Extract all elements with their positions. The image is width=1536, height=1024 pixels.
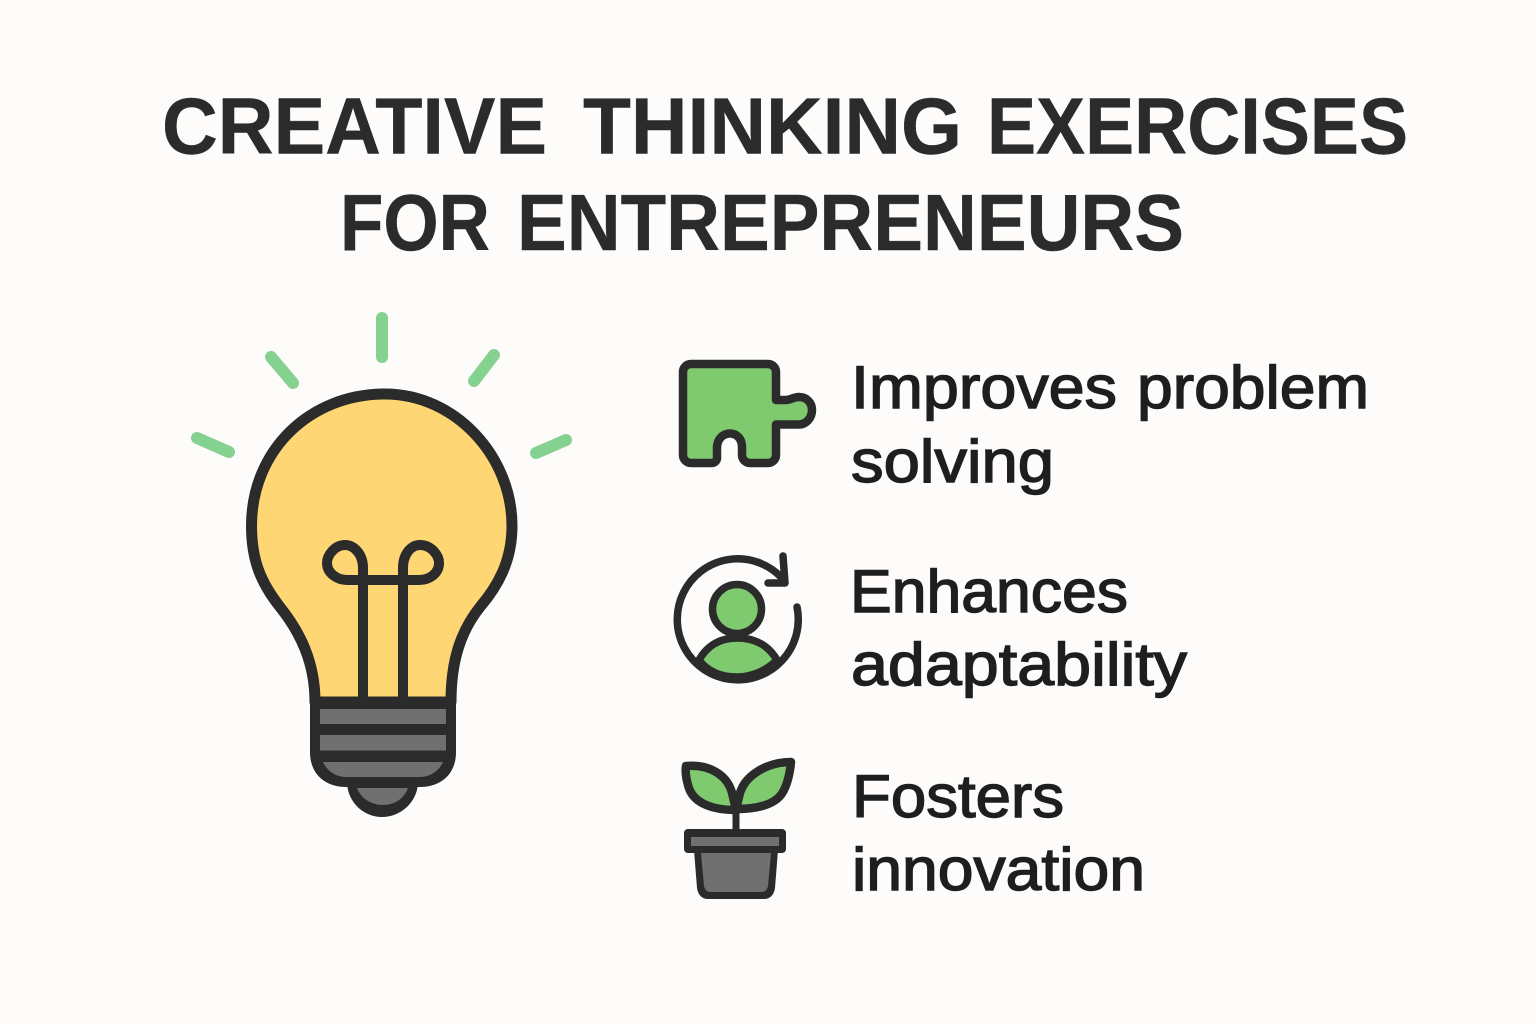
- filament: [327, 545, 439, 700]
- leaves and stem: [686, 762, 791, 832]
- title: [162, 82, 1408, 267]
- light rays: [197, 318, 566, 453]
- title: EXERCISES: [987, 82, 1408, 170]
- title: ENTREPRENEURS: [517, 178, 1184, 267]
- title: FOR: [340, 178, 490, 267]
- pot rim: [684, 829, 786, 853]
- text: enhances adaptability: Enhances: [850, 558, 1128, 625]
- person head: [712, 584, 762, 634]
- bulb base: [310, 697, 456, 787]
- icon: puzzle piece: [683, 364, 812, 463]
- bulb glass: [252, 394, 512, 702]
- text: improves problem solving: [851, 354, 1369, 495]
- text: improves problem solving: problem: [1137, 354, 1369, 421]
- text: fosters innovation: [852, 763, 1145, 903]
- text: enhances adaptability: [850, 558, 1187, 698]
- screw cap: [347, 783, 418, 817]
- title: CREATIVE: [162, 82, 547, 170]
- title: THINKING: [583, 82, 962, 170]
- circular arrow: [677, 559, 798, 680]
- text: fosters innovation: innovation: [852, 836, 1145, 903]
- icon: person with circular arrow: [677, 556, 798, 680]
- pot body: [694, 850, 778, 899]
- icon: light bulb with rays: [197, 318, 566, 817]
- text: fosters innovation: Fosters: [852, 763, 1064, 830]
- person body: [699, 638, 777, 677]
- text: enhances adaptability: adaptability: [851, 631, 1187, 698]
- icon: potted plant: [684, 762, 791, 899]
- text: improves problem solving: Improves: [851, 354, 1117, 421]
- text: improves problem solving: solving: [851, 428, 1054, 495]
